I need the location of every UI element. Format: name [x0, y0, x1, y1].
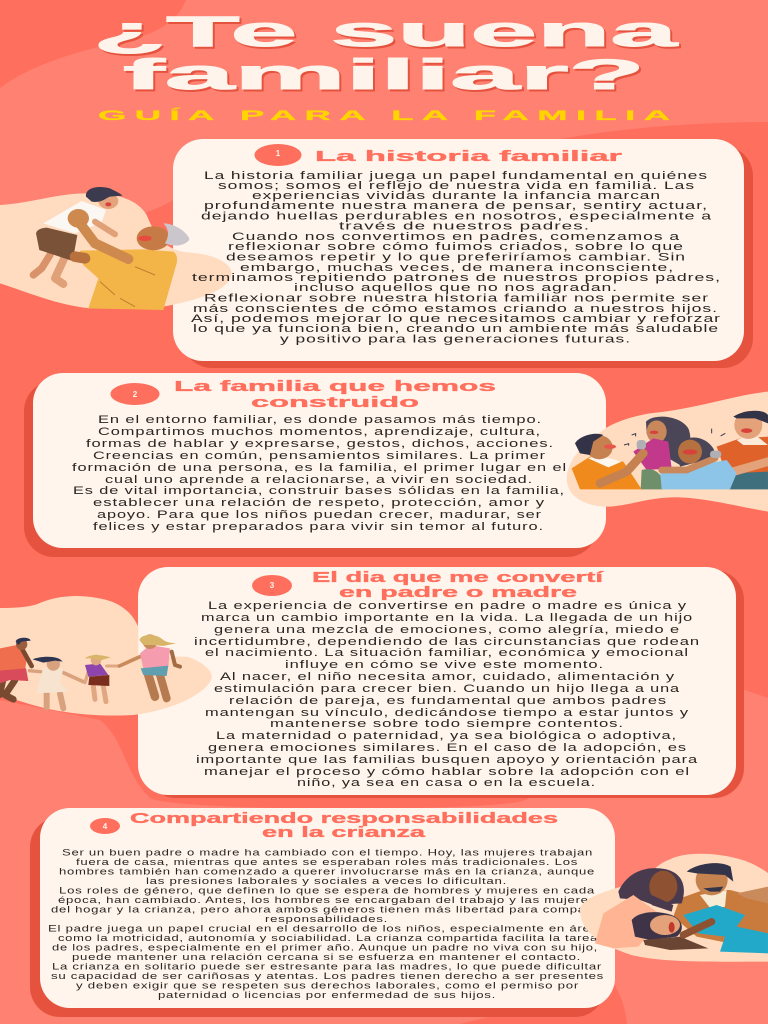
text block: historia: embargo, muchas veces, de manera inconsciente,	[240, 262, 674, 274]
illustration: grandparent lifting child	[0, 187, 232, 310]
heading: la historia familiar: La historia familiar	[315, 149, 623, 165]
text block: crianza	[48, 848, 606, 1000]
text block: crianza: paternidad o licencias por enfermedad de sus hijos.	[158, 990, 496, 1000]
text block: familia: formas de hablar y expresarse, gestos, dichos, acciones.	[86, 438, 554, 450]
text block: familia: establecer una relación de respeto, protección, amor y	[93, 497, 545, 509]
text block: familia: Compartimos muchos momentos, aprendizaje, cultura,	[98, 426, 541, 438]
text block: historia: través de nuestros padres.	[339, 220, 590, 232]
badge 4	[90, 818, 120, 834]
text block: padre o madre	[194, 600, 700, 789]
badge 1: 1	[276, 149, 281, 158]
text block: crianza: fuera de casa, mientras que antes se esperaban roles más tradicionales. Los	[76, 857, 578, 867]
text block: crianza: las presiones laborales y sociales a veces lo dificultan.	[146, 876, 507, 886]
heading: el dia que me converti: en padre o madre	[339, 585, 577, 601]
badge 3	[252, 575, 292, 596]
text block: familia	[72, 414, 567, 533]
text block: familia: Es de vital importancia, construir bases sólidas en la familia,	[73, 485, 565, 497]
text block: crianza: y deben exigir que se respeten sus derechos laborales, como el permiso por	[76, 980, 579, 990]
heading: la familia que hemos construido	[110, 379, 496, 411]
badge 3: 3	[270, 581, 275, 590]
title: ¿Te suena	[93, 8, 680, 56]
heading: compartiendo responsabilidades: Compartiendo responsabilidades	[130, 811, 558, 827]
text block: crianza: como la motricidad, autonomía y sociabilidad. La crianza compartida facilita la tarea	[58, 933, 599, 943]
text block: crianza: El padre juega un papel crucial en el desarrollo de los niños, especialmente en áreas	[48, 924, 606, 934]
text block: padre o madre: el nacimiento. La situación familiar, económica y emocional	[205, 647, 689, 659]
panel: el dia que me converti	[138, 567, 744, 798]
badge 2	[110, 383, 160, 405]
text block: crianza: época, han cambiado. Antes, los hombres se encargaban del trabajo y las mujeres	[58, 895, 596, 905]
text block: historia: somos; somos el reflejo de nuestra vida en familia. Las	[218, 180, 695, 192]
text block: historia: profundamente nuestra manera de pensar, sentiry actuar,	[204, 200, 708, 212]
text block: padre o madre: influye en cómo se vive este momento.	[285, 659, 604, 671]
heading: el dia que me converti	[252, 570, 605, 601]
text block: crianza: responsabilidades.	[265, 914, 388, 924]
badge 1	[254, 144, 302, 166]
illustration: family singing	[567, 392, 768, 512]
heading: la familia que hemos construido: La familia que hemos	[174, 379, 496, 395]
text block: padre o madre: niño, ya sea en casa o en la escuela.	[297, 777, 596, 789]
badge 2: 2	[133, 390, 138, 399]
text block: padre o madre: incertidumbre, dependiendo de las circunstancias que rodean	[194, 636, 700, 648]
heading: compartiendo responsabilidades	[90, 811, 558, 841]
text block: historia: y positivo para las generaciones futuras.	[280, 334, 631, 346]
text block: crianza: de los padres, especialmente en el primer año. Aunque un padre no viva con su hijo,	[52, 942, 598, 952]
panel: compartiendo responsabilidades	[30, 808, 615, 1017]
text block: historia: dejando huellas perdurables en nosotros, especialmente a	[201, 210, 712, 222]
text block: crianza: del hogar y la crianza, pero ahora ambos géneros tienen más libertad para compartir	[51, 904, 604, 914]
illustration: family holding hands	[0, 596, 212, 716]
text block: historia: lo que ya funciona bien, creando un ambiente más saludable	[193, 323, 719, 335]
text block: padre o madre: La maternidad o paternidad, ya sea biológica o adoptiva,	[216, 730, 677, 742]
text block: familia: apoyo. Para que los niños puedan crecer, madurar, ser	[97, 509, 542, 521]
text block: padre o madre: mantenerse sobre todo siempre contentos.	[270, 718, 624, 730]
text block: historia: Reflexionar sobre nuestra historia familiar nos permite ser	[204, 292, 709, 304]
title	[93, 8, 680, 99]
text block: historia: deseamos repetir y lo que preferiríamos cambiar. Sin	[226, 252, 686, 264]
text block: historia: terminamos repitiendo patrones de nuestros propios padres,	[192, 272, 721, 284]
text block: crianza: Ser un buen padre o madre ha cambiado con el tiempo. Hoy, las mujeres trabajan	[62, 848, 593, 858]
text block: padre o madre: importante que las familias busquen apoyo y orientación para	[196, 754, 698, 766]
text block: padre o madre: mantengan su vínculo, dedicándose tiempo a estar juntos y	[205, 707, 689, 719]
illustration: parents with child	[580, 854, 768, 962]
panel: la historia familiar	[173, 139, 753, 368]
text block: crianza: puede mantener una relación cercana si se esfuerza en mantener el contacto.	[72, 952, 581, 962]
text block: historia	[191, 170, 721, 346]
text block: crianza: La crianza en solitario puede ser estresante para las madres, lo que puede dificultar	[52, 962, 602, 972]
text block: historia: Así, podemos mejorar lo que necesitamos cambiar y reforzar	[191, 313, 721, 325]
text block: padre o madre: La experiencia de convertirse en padre o madre es única y	[208, 600, 687, 612]
text block: familia: felices y estar preparados para vivir sin temor al futuro.	[93, 521, 544, 533]
text block: padre o madre: genera una mezcla de emociones, como alegría, miedo e	[214, 624, 680, 636]
title: familiar?	[123, 51, 645, 99]
subtitle: GUÍA PARA LA FAMILIA	[98, 107, 670, 123]
heading: el dia que me converti: El dia que me convertí	[312, 570, 605, 586]
text block: padre o madre: marca un cambio importante en la vida. La llegada de un hijo	[201, 612, 693, 624]
text block: padre o madre: genera emociones similares. En el caso de la adopción, es	[208, 742, 687, 754]
text block: padre o madre: manejar el proceso y cómo hablar sobre la adopción con el	[204, 766, 690, 778]
heading: la familia que hemos construido: construido	[251, 395, 419, 411]
badge 4: 4	[103, 822, 108, 831]
text block: padre o madre: estimulación para crecer bien. Cuando un hijo llega a una	[214, 683, 680, 695]
text block: crianza: su capacidad de ser cariñosas y atentas. Los padres tienen derecho a ser presentes	[51, 971, 604, 981]
text block: historia: experiencias vividas durante la infancia marcan	[252, 190, 661, 202]
text block: historia: reflexionar sobre cómo fuimos criados, sobre lo que	[228, 241, 684, 253]
text block: historia: La historia familiar juega un papel fundamental en quiénes	[204, 170, 708, 182]
heading: compartiendo responsabilidades: en la crianza	[262, 825, 427, 841]
text block: familia: formación de una persona, es la familia, el primer lugar en el	[72, 462, 567, 474]
text block: crianza: Los roles de género, que definen lo que se espera de hombres y mujeres en cada	[59, 886, 596, 896]
text block: padre o madre: Al nacer, el niño necesita amor, cuidado, alimentación y	[220, 671, 675, 683]
text block: familia: Creencias en común, pensamientos similares. La primer	[93, 450, 546, 462]
text block: historia: más conscientes de cómo estamos criando a nuestros hijos.	[193, 303, 718, 315]
text block: familia: cual uno aprende a relacionarse, a vivir en sociedad.	[105, 474, 533, 486]
text block: historia: Cuando nos convertimos en padres, comenzamos a	[232, 231, 680, 243]
text block: crianza: hombres también han comenzado a querer involucrarse más en la crianza, aunque	[59, 866, 595, 876]
text block: historia: incluso aquellos que no nos agradan.	[294, 282, 618, 294]
text block: familia: En el entorno familiar, es donde pasamos más tiempo.	[98, 414, 542, 426]
panel: la familia que hemos construido	[24, 373, 606, 557]
text block: padre o madre: relación de pareja, es fundamental que ambos padres	[229, 695, 667, 707]
heading: la historia familiar	[254, 144, 623, 166]
